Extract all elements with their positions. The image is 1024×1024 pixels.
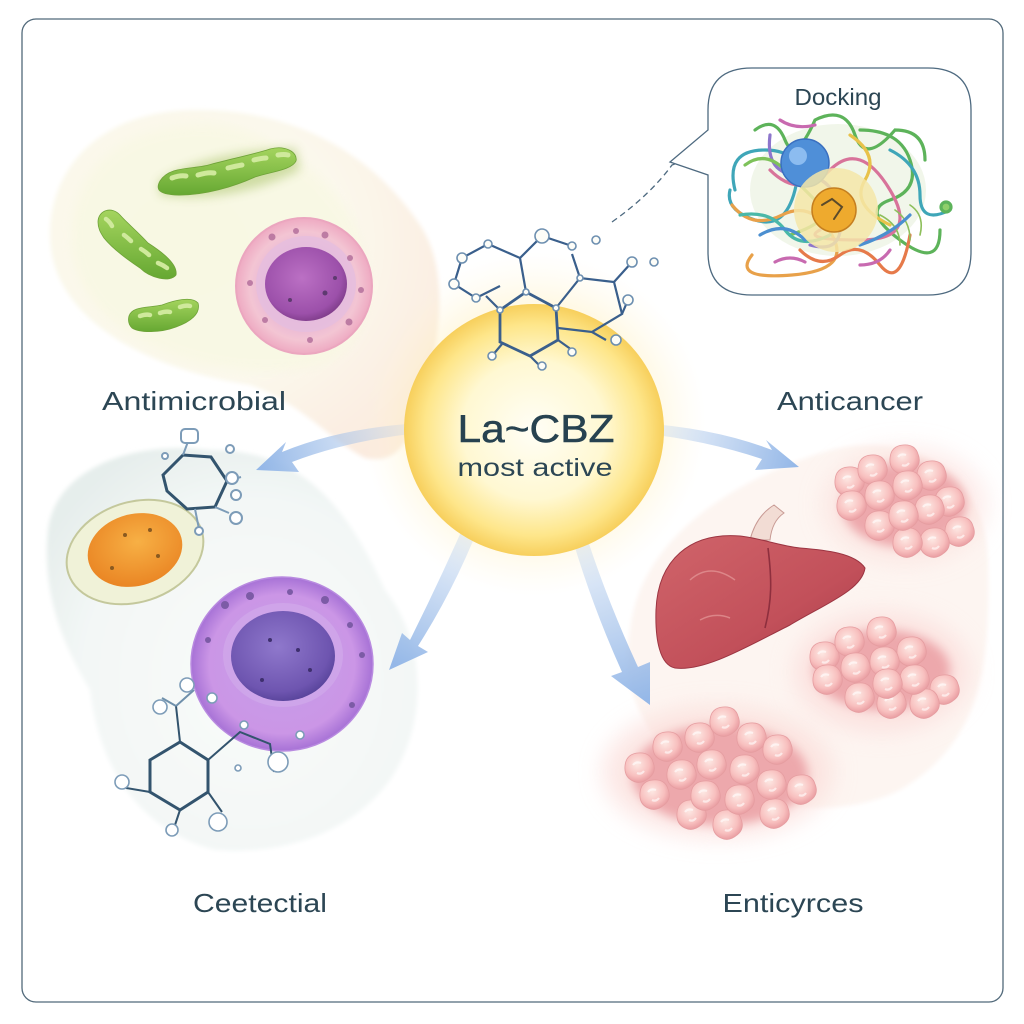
icon: pink cell — [236, 218, 372, 354]
icon: tumour tissue top right — [835, 445, 974, 557]
panel: antimicrobial blob — [50, 110, 439, 459]
glow behind hub — [362, 252, 706, 596]
hub label: La~CBZ — [458, 408, 614, 451]
icon: molecule upper left — [162, 429, 242, 535]
arrow: to enzyme — [563, 505, 650, 705]
icon: purple cell — [191, 577, 373, 751]
icon: central molecule — [449, 229, 658, 370]
icon: tumour tissue middle right — [810, 617, 959, 718]
icon: tumour tissue bottom — [625, 707, 816, 839]
icon: rod bacterium bottom — [128, 299, 198, 332]
icon: rod bacterium left — [98, 210, 176, 279]
hub sublabel: most active — [458, 454, 612, 482]
label: Enticyrces: Enticyrces — [722, 888, 864, 918]
dashed connector to docking callout — [612, 152, 706, 222]
panel: anticancer blob — [603, 445, 988, 839]
panel: docking callout — [670, 68, 971, 295]
icon: molecule lower — [115, 678, 304, 836]
icon: orange cell — [53, 483, 217, 621]
arrow: to antimicrobial side — [256, 423, 420, 472]
label: Ceetectial: Ceetectial — [193, 888, 327, 918]
arrow: to anticancer — [640, 423, 799, 470]
panel: cytotoxic blob — [47, 429, 418, 851]
docking label: Docking — [794, 84, 882, 110]
hub: La~CBZ circle — [404, 304, 664, 556]
icon: liver — [656, 505, 865, 668]
label: Anticancer: Anticancer — [777, 386, 923, 416]
label: Antimicrobial: Antimicrobial — [102, 386, 286, 416]
icon: rod bacterium top — [158, 148, 300, 197]
arrow: to cytotoxic — [389, 500, 487, 670]
icon: protein ribbon — [729, 115, 951, 276]
